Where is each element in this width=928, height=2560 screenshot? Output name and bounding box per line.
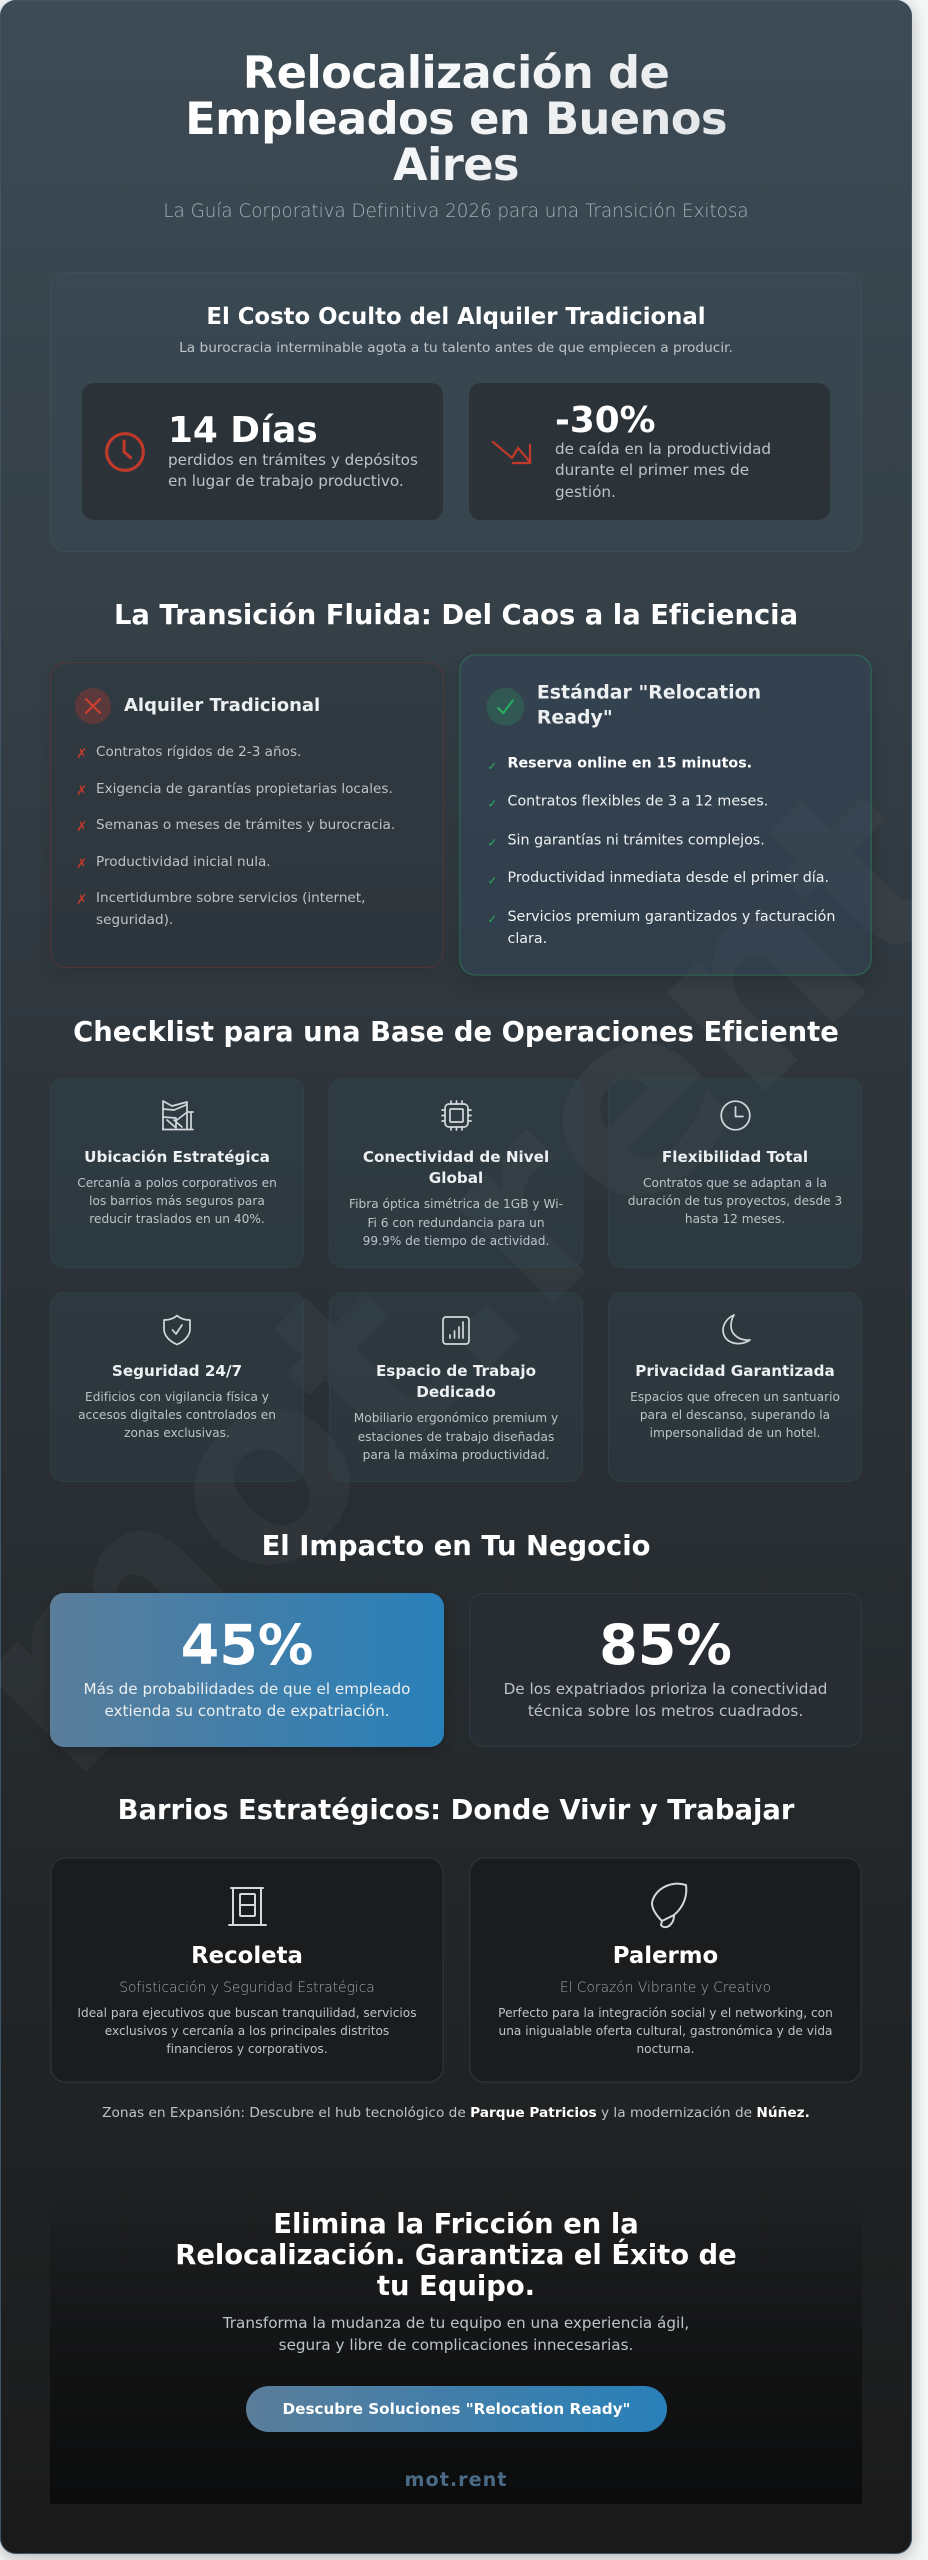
list: tradicional: ✗ xyxy=(76,819,87,835)
text: costo subtitle: La burocracia interminable agota a tu talento antes de que empiecen a producir. xyxy=(179,340,733,356)
text: espacio de trabajo xyxy=(354,1411,558,1462)
text: cta: segura y libre de complicaciones innecesarias. xyxy=(279,2336,633,2354)
card: conectividad xyxy=(329,1078,583,1268)
text: 45% description xyxy=(84,1680,410,1720)
list: tradicional: Contratos rígidos de 2-3 años. xyxy=(96,744,301,760)
panel: alquiler tradicional xyxy=(50,662,444,968)
panel: costo oculto xyxy=(50,272,862,552)
button: cta: Descubre Soluciones "Relocation Ready" xyxy=(283,2400,630,2418)
text: 85% description: De los expatriados prioriza la conectividad xyxy=(504,1680,827,1698)
heading: conectividad xyxy=(363,1148,549,1187)
text: flexibilidad: hasta 12 meses. xyxy=(685,1212,785,1226)
text: recoleta tagline: Sofisticación y Seguridad Estratégica xyxy=(119,1980,375,1996)
heading: cta: Elimina la Fricción en la xyxy=(273,2208,639,2240)
text: 14 días description: en lugar de trabajo productivo. xyxy=(168,472,404,490)
panel: relocation ready xyxy=(459,654,872,976)
text: seguridad: accesos digitales controlados en xyxy=(78,1408,276,1422)
icon: moon xyxy=(722,1314,751,1344)
list: relocation ready: ✓ xyxy=(488,912,497,926)
icon: clock xyxy=(720,1100,751,1131)
text: palermo description: una inigualable oferta cultural, gastronómica y de vida xyxy=(498,2024,833,2038)
text: palermo description: Perfecto para la integración social y el networking, con xyxy=(498,2006,833,2020)
heading: checklist: Checklist para una Base de Operaciones Eficiente xyxy=(73,1017,839,1048)
text: conectividad: Fi 6 con redundancia para un xyxy=(367,1216,545,1230)
list: relocation ready xyxy=(488,755,835,948)
list: relocation ready: Productividad inmediata desde el primer día. xyxy=(507,870,829,886)
icon: cross xyxy=(75,688,111,724)
heading: flexibilidad: Flexibilidad Total xyxy=(662,1148,808,1166)
list: tradicional: ✗ xyxy=(76,856,87,872)
text: recoleta description: exclusivos y cercanía a los principales distritos xyxy=(105,2024,389,2038)
icon: chart tablet xyxy=(442,1316,470,1345)
heading: costo oculto: El Costo Oculto del Alquiler Tradicional xyxy=(206,304,706,330)
list: tradicional: Productividad inicial nula. xyxy=(96,854,271,870)
heading: alquiler tradicional: Alquiler Tradicional xyxy=(124,695,320,716)
list: tradicional: ✗ xyxy=(76,782,87,798)
text: -30% description: durante el primer mes de xyxy=(555,461,749,479)
text: ubicación: reducir traslados en un 40%. xyxy=(89,1212,265,1226)
text: -30% description: de caída en la productividad xyxy=(555,440,771,458)
heading: espacio de trabajo: Dedicado xyxy=(416,1383,496,1401)
list: tradicional: seguridad). xyxy=(96,912,173,928)
card: seguridad xyxy=(50,1292,304,1482)
text: seguridad xyxy=(78,1390,276,1440)
text: ubicación: los barrios más seguros para xyxy=(89,1194,265,1208)
text: privacidad: para el descanso, superando la xyxy=(640,1408,830,1422)
heading: seguridad: Seguridad 24/7 xyxy=(112,1362,242,1380)
list: relocation ready: Sin garantías ni trámites complejos. xyxy=(507,831,765,848)
stat: 14 días xyxy=(82,383,443,520)
text: zonas en expansión: Zonas en Expansión: Descubre el hub tecnológico de Parque Patricios y la modernización de Núñez. xyxy=(102,2105,810,2121)
card: ubicación xyxy=(50,1078,304,1268)
text: conectividad xyxy=(349,1197,563,1248)
text: flexibilidad: duración de tus proyectos, desde 3 xyxy=(628,1194,842,1208)
list: relocation ready: ✓ xyxy=(488,874,497,888)
panel: recoleta xyxy=(50,1857,444,2083)
icon: check xyxy=(486,688,524,726)
icon: clock xyxy=(105,432,145,472)
text: flexibilidad: Contratos que se adaptan a la xyxy=(643,1176,827,1190)
list: relocation ready: ✓ xyxy=(488,759,497,773)
text: cta xyxy=(222,2314,689,2354)
text: ubicación: Cercanía a polos corporativos en xyxy=(77,1176,277,1190)
heading: palermo: Palermo xyxy=(613,1943,718,1969)
text: conectividad: Fibra óptica simétrica de 1GB y Wi- xyxy=(349,1197,563,1211)
heading: cta xyxy=(175,2208,737,2302)
heading: cta: tu Equipo. xyxy=(377,2270,535,2302)
text: espacio de trabajo: para la máxima productividad. xyxy=(363,1448,549,1462)
heading: ubicación: Ubicación Estratégica xyxy=(84,1148,270,1166)
button: cta xyxy=(246,2386,667,2432)
heading: relocation ready: Ready" xyxy=(537,707,613,729)
number: 45%: 45% xyxy=(181,1613,313,1678)
icon: column building xyxy=(228,1887,267,1926)
heading: transición: La Transición Fluida: Del Caos a la Eficiencia xyxy=(114,600,798,631)
text: 14 días description: perdidos en trámites y depósitos xyxy=(168,451,418,469)
title: Aires xyxy=(393,138,519,190)
text: 45% description: extienda su contrato de expatriación. xyxy=(104,1702,390,1720)
number: 14 días: 14 Días xyxy=(168,410,318,451)
list: relocation ready: ✓ xyxy=(488,836,497,849)
text: recoleta description xyxy=(77,2006,417,2056)
heading: barrios: Barrios Estratégicos: Donde Vivir y Trabajar xyxy=(118,1795,794,1826)
heading: cta: Relocalización. Garantiza el Éxito de xyxy=(175,2240,737,2270)
text: 85% description: técnica sobre los metros cuadrados. xyxy=(528,1702,803,1720)
title: Relocalización de xyxy=(243,46,669,98)
text: privacidad: Espacios que ofrecen un santuario xyxy=(630,1390,840,1404)
text: recoleta description: Ideal para ejecutivos que buscan tranquilidad, servicios xyxy=(77,2006,417,2020)
list: relocation ready: Servicios premium garantizados y facturación xyxy=(507,908,835,925)
heading: conectividad: Global xyxy=(429,1169,483,1187)
heading: espacio de trabajo xyxy=(376,1362,536,1401)
text: -30% description: gestión. xyxy=(555,483,616,501)
icon: leaf xyxy=(651,1882,688,1928)
number: -30%: -30% xyxy=(555,400,656,441)
text: seguridad: zonas exclusivas. xyxy=(124,1426,230,1440)
text: ubicación xyxy=(77,1176,277,1226)
text: conectividad: 99.9% de tiempo de actividad. xyxy=(363,1234,549,1248)
icon: chip xyxy=(441,1100,472,1131)
panel: palermo xyxy=(469,1857,862,2083)
text: seguridad: Edificios con vigilancia física y xyxy=(85,1390,269,1404)
text: flexibilidad xyxy=(628,1176,842,1226)
icon: building xyxy=(162,1100,194,1130)
heading: conectividad: Conectividad de Nivel xyxy=(363,1148,549,1166)
text: palermo description: nocturna. xyxy=(636,2042,695,2056)
heading: privacidad: Privacidad Garantizada xyxy=(635,1362,835,1380)
text: palermo description xyxy=(498,2006,833,2056)
heading: recoleta: Recoleta xyxy=(191,1943,303,1969)
panel: call to action xyxy=(50,2180,862,2504)
heading: impacto: El Impacto en Tu Negocio xyxy=(262,1531,650,1562)
list: tradicional: Exigencia de garantías propietarias locales. xyxy=(96,780,393,796)
subtitle: La Guía Corporativa Definitiva 2026 para una Transición Exitosa xyxy=(163,200,749,222)
heading: relocation ready xyxy=(537,682,761,729)
logo: mot.rent: mot.rent xyxy=(405,2468,507,2491)
text: palermo tagline: El Corazón Vibrante y Creativo xyxy=(560,1980,771,1996)
text: privacidad xyxy=(630,1390,840,1440)
title xyxy=(0,50,912,188)
list: tradicional: ✗ xyxy=(76,746,87,762)
list: tradicional xyxy=(76,744,395,928)
text: cta: Transforma la mudanza de tu equipo en una experiencia ágil, xyxy=(223,2314,689,2332)
card: privacidad xyxy=(608,1292,862,1482)
stat card: 45% xyxy=(50,1593,444,1747)
text: espacio de trabajo: estaciones de trabajo diseñadas xyxy=(358,1430,554,1444)
title: Empleados en Buenos xyxy=(185,92,727,144)
text: espacio de trabajo: Mobiliario ergonómico premium y xyxy=(354,1411,558,1425)
list: tradicional: Incertidumbre sobre servicios (internet, xyxy=(96,890,365,906)
heading: espacio de trabajo: Espacio de Trabajo xyxy=(376,1362,536,1380)
text: recoleta description: financieros y corporativos. xyxy=(166,2042,328,2056)
card: flexibilidad xyxy=(608,1078,862,1268)
stat: -30% xyxy=(469,383,830,520)
card: espacio de trabajo xyxy=(329,1292,583,1482)
list: relocation ready: Contratos flexibles de 3 a 12 meses. xyxy=(507,793,768,810)
icon: shield xyxy=(163,1314,191,1346)
icon: trending down xyxy=(492,441,532,464)
list: tradicional: Semanas o meses de trámites y burocracia. xyxy=(96,817,395,833)
stat card: 85% xyxy=(469,1593,862,1747)
text: 14 días description xyxy=(168,451,418,490)
text: privacidad: impersonalidad de un hotel. xyxy=(650,1426,820,1440)
list: relocation ready: clara. xyxy=(507,931,547,948)
heading: relocation ready: Estándar "Relocation xyxy=(537,682,761,704)
list: relocation ready: Reserva online en 15 minutos. xyxy=(507,755,752,772)
text: -30% description xyxy=(555,440,771,501)
list: tradicional: ✗ xyxy=(76,892,87,908)
number: 85%: 85% xyxy=(599,1613,732,1678)
text: 45% description: Más de probabilidades de que el empleado xyxy=(84,1680,410,1698)
list: relocation ready: ✓ xyxy=(488,797,497,811)
text: 85% description xyxy=(504,1680,827,1720)
